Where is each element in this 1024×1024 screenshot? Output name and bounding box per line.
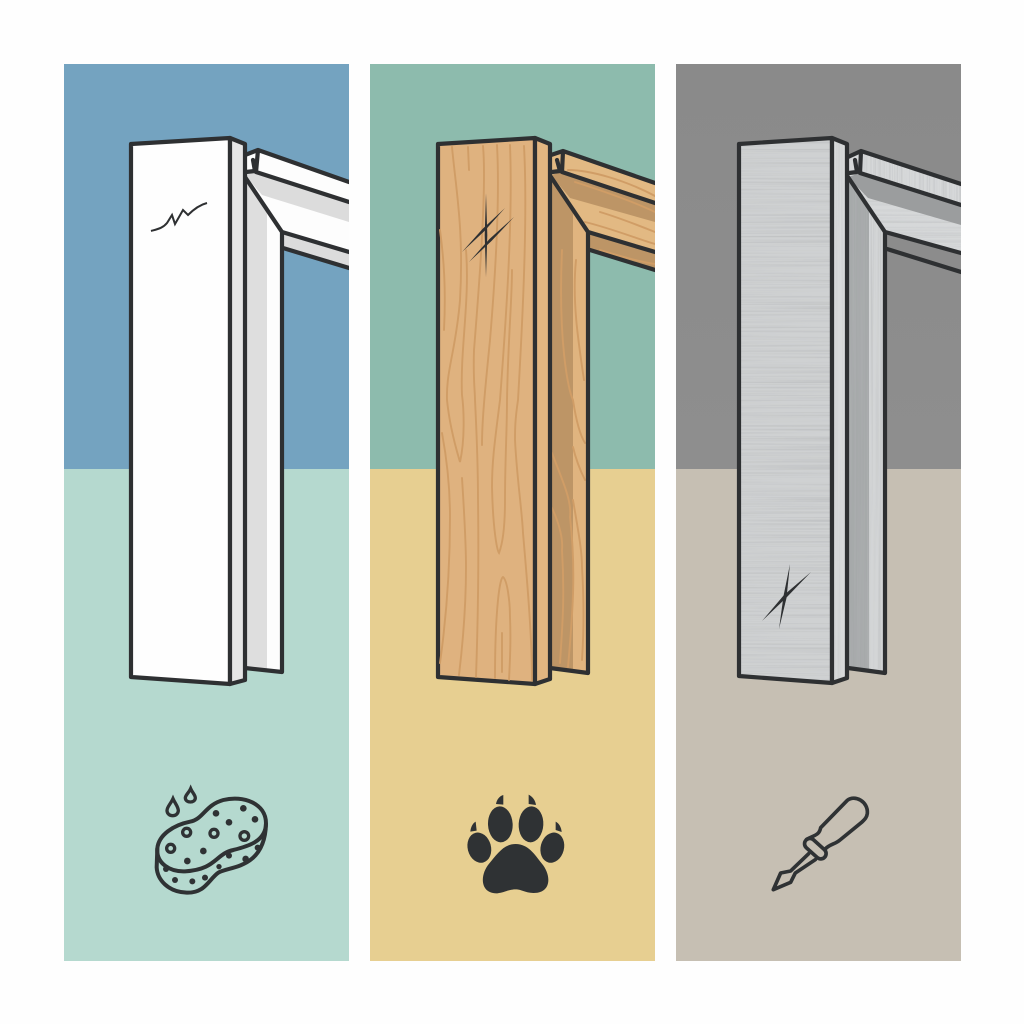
- header rail of metal frame: [845, 145, 965, 272]
- front face of metal door trim: [735, 135, 835, 687]
- icon: wet sponge: [157, 789, 266, 893]
- floor background: [676, 469, 961, 961]
- jamb of wood frame: [550, 177, 588, 673]
- scratch marks: [462, 193, 514, 277]
- panel: metal door frame on grey and taupe: [676, 64, 965, 961]
- floor background: [370, 469, 655, 961]
- icon: screwdriver: [773, 798, 867, 890]
- wood grain lines: [440, 145, 532, 680]
- wall background: [676, 64, 961, 469]
- jamb of metal frame: [845, 175, 887, 675]
- panel: white door frame on blue and mint: [64, 64, 349, 961]
- floor background: [64, 469, 349, 961]
- header rail of wood frame: [551, 151, 655, 270]
- crack scuff mark: [151, 203, 207, 231]
- wall background: [64, 64, 349, 469]
- wall background: [370, 64, 655, 469]
- side face of metal door trim: [830, 135, 850, 687]
- jamb of white frame: [245, 177, 282, 672]
- header rail of white frame: [245, 150, 349, 268]
- side face of white door trim: [230, 138, 245, 684]
- side face of wood door trim: [535, 138, 550, 684]
- icon: paw print: [464, 795, 568, 893]
- panel: wood door frame on teal and yellow: [370, 64, 655, 961]
- scratch marks: [762, 564, 811, 629]
- front face of white door trim: [131, 138, 230, 684]
- front face of wood door trim: [438, 138, 535, 684]
